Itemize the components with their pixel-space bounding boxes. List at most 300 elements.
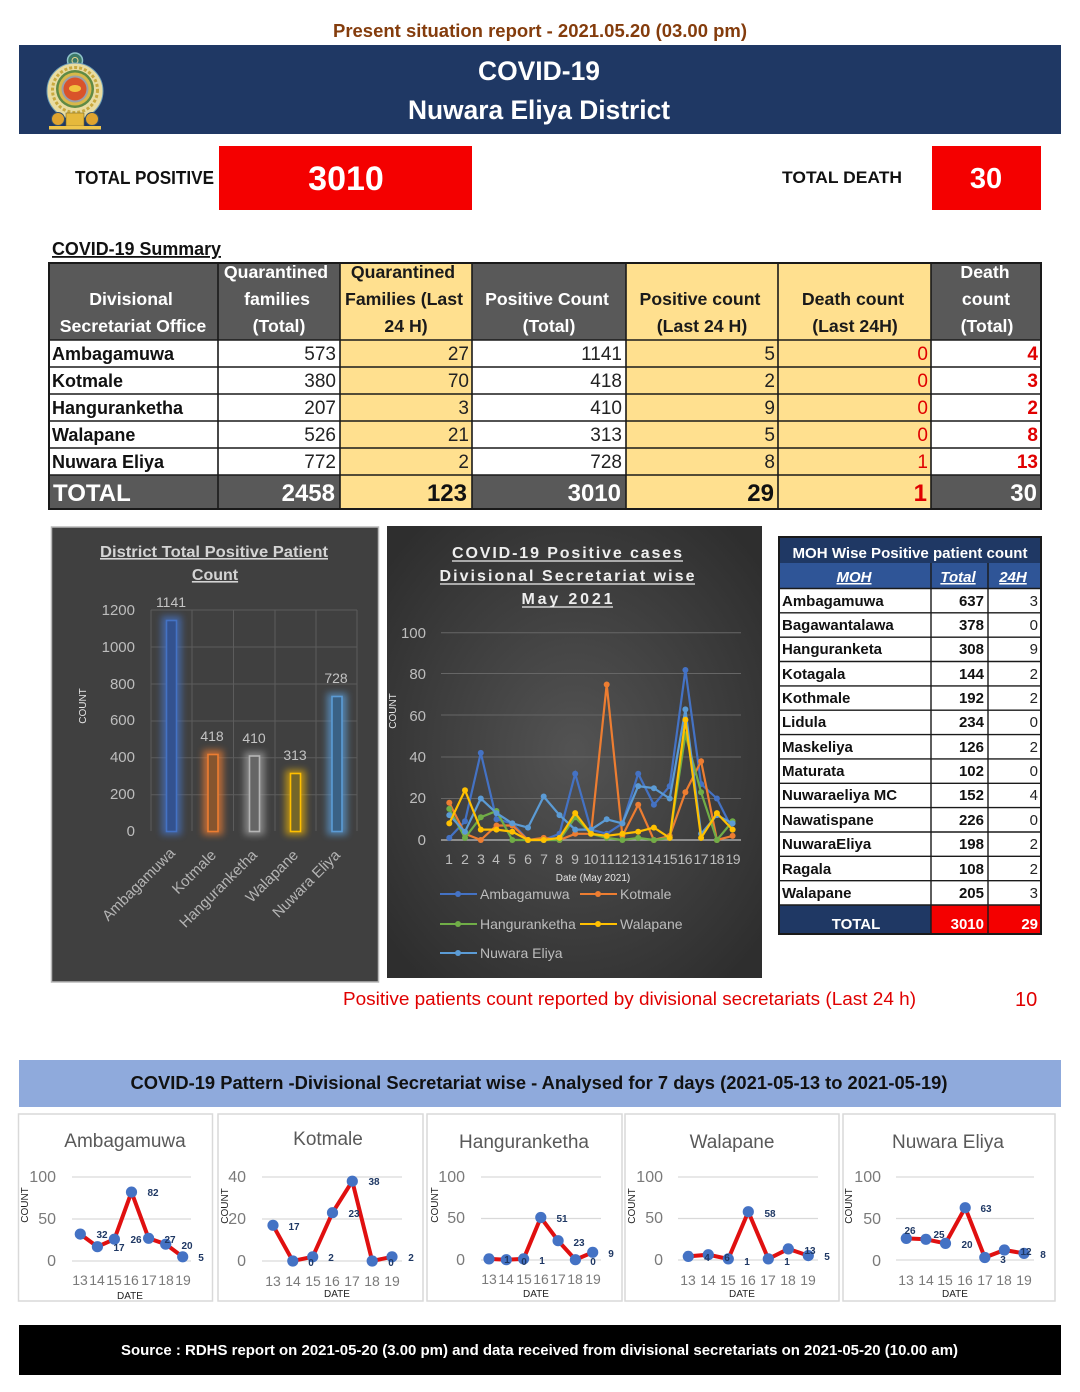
panel: Ambagamuwa pattern chart: 5 [198,1253,204,1264]
x axis labels: 16 [678,851,693,867]
table row: Nuwara Eliya: 8 [764,452,775,473]
panel: Kotmale pattern chart: 17 [344,1273,360,1289]
panel: Walapane pattern chart: 16 [740,1272,756,1288]
bar: Hanguranketha [242,730,266,835]
panel: Ambagamuwa pattern chart: DATE [117,1291,143,1302]
x axis labels: 8 [555,851,563,867]
table header [60,262,1013,336]
table row: Kotmale: 3 [1027,371,1038,392]
MOH rows: 144 [959,666,985,683]
panel: Nuwara Eliya pattern chart: 25 [933,1230,945,1241]
MOH rows: 637 [959,593,984,610]
table row: Ambagamuwa: 4 [1027,344,1038,365]
table row: Ambagamuwa: 5 [764,344,775,365]
table header: Quarantined [224,262,328,282]
table row: total: 29 [747,480,774,507]
x axis title: Date (May 2021) [556,873,630,884]
panel: Hanguranketha pattern chart: 1 [539,1256,545,1267]
MOH rows: 198 [959,836,984,853]
bar chart heading [100,544,329,584]
panel: Nuwara Eliya pattern chart: 17 [977,1272,993,1288]
table header: Positive count [640,289,761,309]
panel: Ambagamuwa pattern chart: 13 [72,1272,88,1288]
x axis labels: 3 [477,851,485,867]
panel: Nuwara Eliya pattern chart: 63 [980,1204,992,1215]
MOH rows: 126 [959,739,984,756]
table header: families [244,289,310,309]
y axis labels: 0 [418,832,426,849]
x axis labels: 15 [662,851,678,867]
y axis labels: 20 [409,790,426,807]
panel: Ambagamuwa pattern chart: 16 [123,1272,139,1288]
MOH rows: 3 [1030,593,1038,610]
legend: Hanguranketha [480,916,576,932]
title: COVID-19 [478,56,600,86]
panel: Kotmale pattern chart: 2 [408,1253,414,1264]
panel: Hanguranketha pattern chart: 15 [516,1271,532,1287]
total positive [75,146,472,210]
series: Hanguranketha [449,734,733,840]
table row: Kotmale: 418 [590,371,622,392]
MOH rows: 226 [959,812,984,829]
panel: Walapane pattern chart: DATE [729,1289,755,1300]
table row: Hanguranketha: 410 [590,398,622,419]
total death [782,146,1041,210]
x axis labels: 11 [600,851,615,867]
MOH rows: Kothmale [782,690,850,707]
MOH rows: 234 [959,714,985,731]
table row: Walapane: 526 [304,425,336,446]
MOH rows: 108 [959,861,984,878]
panel: Ambagamuwa pattern chart: 17 [141,1272,157,1288]
series: Ambagamuwa [449,670,733,840]
panel: Nuwara Eliya pattern chart: 26 [904,1226,916,1237]
panel: Walapane pattern chart: 18 [780,1272,796,1288]
table row: Walapane: 5 [764,425,775,446]
panel: Ambagamuwa pattern chart: 82 [147,1188,159,1199]
panel: Hanguranketha pattern chart: 0 [456,1252,465,1269]
x axis labels: 2 [461,851,469,867]
total positive: TOTAL POSITIVE [75,168,214,188]
panel: Kotmale pattern chart: 18 [364,1273,380,1289]
x axis labels: 12 [614,851,630,867]
source footer [19,1325,1061,1375]
MOH rows: 2 [1030,861,1038,878]
series: Kotmale [449,684,733,840]
line chart heading: May 2021 [522,591,613,608]
panel: Hanguranketha pattern chart [427,1114,622,1301]
panel: Nuwara Eliya pattern chart: 0 [872,1253,881,1270]
table row: Ambagamuwa [52,344,1038,365]
panel: Walapane pattern chart: 100 [636,1169,663,1186]
table header: Quarantined [351,262,455,282]
legend: Kotmale [620,886,672,902]
MOH rows: Ragala [782,861,832,878]
panel: Nuwara Eliya pattern chart: 15 [937,1272,953,1288]
panel: Kotmale pattern chart: 15 [305,1273,321,1289]
table header: Families (Last [345,289,463,309]
table row: Hanguranketha: 0 [917,398,928,419]
legend [440,886,683,961]
panel: Hanguranketha pattern chart: 0 [521,1257,527,1268]
table header: Death count [802,289,904,309]
panel: Nuwara Eliya pattern chart: 13 [898,1272,914,1288]
MOH column headers: 24H [998,569,1028,586]
table row: Nuwara Eliya [52,452,1038,473]
panel: Hanguranketha pattern chart: 17 [550,1271,566,1287]
table row: Ambagamuwa: 0 [917,344,928,365]
y axis labels: 0 [127,823,135,840]
panel: Nuwara Eliya pattern chart: 3 [1000,1255,1006,1266]
panel: Kotmale pattern chart: 19 [384,1273,400,1289]
panel: Ambagamuwa pattern chart: 100 [29,1169,56,1186]
table row: total: 123 [427,480,467,507]
table row: Ambagamuwa: 1141 [581,344,622,365]
panel: Nuwara Eliya pattern chart: 12 [1020,1247,1032,1258]
table header: (Last 24H) [812,316,898,336]
panel: Kotmale pattern chart [218,1114,423,1301]
title banner [19,45,1061,134]
total death: 30 [970,163,1002,195]
panel: Kotmale pattern chart: 16 [324,1273,340,1289]
panel: Nuwara Eliya pattern chart: 100 [854,1169,881,1186]
table row: Nuwara Eliya: 728 [590,452,622,473]
x axis labels: 9 [571,851,579,867]
x axis labels [445,851,741,867]
table header: (Total) [253,316,305,336]
category labels: Nuwara Eliya [269,846,344,921]
bar: Walapane: 313 [283,747,307,763]
table header: Secretariat Office [60,316,206,336]
panel: Walapane pattern chart: 15 [720,1272,736,1288]
x axis labels: 13 [630,851,646,867]
table row: total: 2458 [282,480,335,507]
panel: Kotmale pattern chart: Kotmale [293,1129,363,1150]
panel: Kotmale pattern chart: 38 [368,1177,380,1188]
panel: Nuwara Eliya pattern chart: 18 [996,1272,1012,1288]
table row: Kotmale: 380 [304,371,336,392]
table row: total: TOTAL [53,480,131,507]
panel: Hanguranketha pattern chart: 23 [573,1238,585,1249]
table row: Kotmale: 2 [764,371,775,392]
category labels: Walapane [242,847,302,906]
y axis labels: 40 [409,749,426,766]
x axis labels: 5 [508,851,516,867]
panel: Walapane pattern chart [625,1114,839,1301]
MOH rows: NuwaraEliya [782,836,872,853]
report date heading: Present situation report - 2021.05.20 (03.00 pm) [333,21,747,41]
MOH rows: 0 [1030,617,1038,634]
MOH rows: 2 [1030,666,1038,683]
table row: Nuwara Eliya: 13 [1017,452,1038,473]
y axis labels: 200 [110,786,135,803]
bar: Hanguranketha: 410 [242,730,266,746]
MOH rows: Lidula [782,714,827,731]
MOH rows: Nawatispane [782,812,874,829]
table row: Hanguranketha: 3 [458,398,469,419]
y axis labels: 600 [110,712,135,729]
MOH rows: Maturata [782,763,845,780]
MOH rows: Hanguranketa [782,641,883,658]
series: Walapane [449,720,733,840]
title [408,56,670,125]
table header: (Total) [961,316,1013,336]
bar: Ambagamuwa [156,594,186,835]
category labels [99,844,344,931]
table row: Hanguranketha: 207 [304,398,336,419]
y axis labels: 100 [401,625,426,642]
y axis labels: 400 [110,749,135,766]
MOH table heading: MOH Wise Positive patient count [792,545,1028,562]
table row: total: 30 [1010,480,1037,507]
panel: Hanguranketha pattern chart: 1 [504,1255,510,1266]
MOH rows: 0 [1030,714,1038,731]
MOH rows [782,593,1038,902]
category labels: Ambagamuwa [99,844,179,925]
pattern section banner: COVID-19 Pattern -Divisional Secretariat wise - Analysed for 7 days (2021-05-13 to 2021-05-19) [130,1073,948,1093]
panel: Nuwara Eliya pattern chart: 14 [918,1272,934,1288]
x axis labels: 7 [540,851,548,867]
panel: Nuwara Eliya pattern chart: 50 [863,1211,881,1228]
table row: Walapane: Walapane [52,425,135,445]
category labels: Hanguranketha [176,846,261,931]
panel: Hanguranketha pattern chart: 0 [590,1257,596,1268]
panel: Hanguranketha pattern chart: DATE [523,1289,549,1300]
bar chart heading: District Total Positive Patient [100,544,329,561]
MOH rows: Nuwaraeliya MC [782,787,897,804]
panel: Ambagamuwa pattern chart: Ambagamuwa [64,1131,186,1152]
table row: Walapane [52,425,1038,446]
panel: Walapane pattern chart: COUNT [627,1188,638,1224]
panel: Ambagamuwa pattern chart: COUNT [20,1187,31,1223]
table row: Walapane: 313 [590,425,622,446]
panel: Walapane pattern chart: 0 [654,1252,663,1269]
table header: Death [960,262,1010,282]
MOH rows: Ambagamuwa [782,593,884,610]
MOH rows: 192 [959,690,984,707]
y axis labels: 60 [409,708,426,725]
panel: Ambagamuwa pattern chart [18,1114,212,1302]
table row: Hanguranketha: 9 [764,398,775,419]
MOH column headers: MOH [836,569,873,586]
icon: national emblem [47,53,103,130]
table row: Kotmale: 70 [448,371,469,392]
MOH total row: 29 [1021,916,1038,933]
panel: Walapane pattern chart: 4 [704,1253,710,1264]
MOH total row: TOTAL [832,916,880,933]
panel: Kotmale pattern chart: 17 [288,1222,300,1233]
panel: Kotmale pattern chart: 14 [285,1273,301,1289]
panel: Walapane pattern chart: Walapane [690,1132,774,1153]
table row: Walapane: 8 [1027,425,1038,446]
summary heading: COVID-19 Summary [52,239,221,259]
table row: Hanguranketha: Hanguranketha [52,398,184,418]
MOH total row: 3010 [951,916,984,933]
table header: count [962,289,1010,309]
panel: Hanguranketha pattern chart: 51 [556,1214,568,1225]
y axis labels: 800 [110,676,135,693]
MOH rows: 205 [959,885,984,902]
bar: Kotmale: 418 [200,728,224,744]
MOH rows: Maskeliya [782,739,854,756]
y axis labels [401,625,426,849]
MOH rows: 2 [1030,836,1038,853]
panel: Ambagamuwa pattern chart: 27 [164,1235,176,1246]
divisional secretariat report note: Positive patients count reported by divisional secretariats (Last 24 h) [343,989,916,1009]
total death: TOTAL DEATH [782,168,902,187]
MOH rows: 3 [1030,885,1038,902]
table header: (Total) [523,316,575,336]
table header: Positive Count [485,289,609,309]
panel: Kotmale pattern chart: 23 [348,1209,360,1220]
panel: Nuwara Eliya pattern chart: 16 [957,1272,973,1288]
panel: Walapane pattern chart: 17 [760,1272,776,1288]
category labels: Kotmale [169,847,220,898]
x axis labels: 14 [646,851,662,867]
panel: Hanguranketha pattern chart: Hanguranketha [459,1132,589,1153]
table row: total: 1 [914,480,927,507]
table row: Kotmale: Kotmale [52,371,123,391]
MOH rows: 2 [1030,690,1038,707]
table row: total [53,480,1037,507]
y axis labels: 1000 [102,639,135,656]
table row: Walapane: 0 [917,425,928,446]
table row: total: 3010 [568,480,621,507]
MOH total row [832,916,1038,933]
panel: Walapane pattern chart: 19 [800,1272,816,1288]
table row: Hanguranketha [52,398,1038,419]
table header: Divisional [89,289,173,309]
table row: Nuwara Eliya: Nuwara Eliya [52,452,165,472]
panel: Walapane pattern chart: 1 [744,1257,750,1268]
axis title: count: COUNT [388,693,399,729]
source footer: Source : RDHS report on 2021-05-20 (3.00 pm) and data received from divisional secretariats on 2021-05-20 (10.00 am) [121,1343,958,1359]
y axis labels [102,602,135,840]
table row: Kotmale: 0 [917,371,928,392]
panel: Ambagamuwa pattern chart: 0 [47,1253,56,1270]
x axis labels: 4 [492,851,500,867]
panel: Kotmale pattern chart: 40 [228,1169,246,1186]
panel: Ambagamuwa pattern chart: 18 [158,1272,174,1288]
panel: Hanguranketha pattern chart: 16 [533,1271,549,1287]
MOH column headers [836,569,1028,586]
panel: MOH wise table [779,537,1041,934]
panel: Kotmale pattern chart: 0 [308,1258,314,1269]
panel: Walapane pattern chart: 58 [764,1209,776,1220]
panel: Hanguranketha pattern chart: 18 [567,1271,583,1287]
panel: Hanguranketha pattern chart: 50 [447,1210,465,1227]
panel: Nuwara Eliya pattern chart: 20 [961,1240,973,1251]
total positive: 3010 [308,160,384,198]
panel: Kotmale pattern chart: 0 [388,1258,394,1269]
summary table [49,262,1041,509]
line chart heading: COVID-19 Positive cases [452,545,682,562]
table row: Kotmale [52,371,1038,392]
bar chart heading: Count [192,567,239,584]
panel: Walapane pattern chart: 50 [645,1210,663,1227]
line chart heading: Divisional Secretariat wise [440,568,695,585]
legend: Walapane [620,916,683,932]
panel: Kotmale pattern chart: COUNT [220,1188,231,1224]
panel: Walapane pattern chart: 5 [824,1252,830,1263]
MOH rows: 0 [1030,763,1038,780]
title: Nuwara Eliya District [408,95,670,125]
panel: Hanguranketha pattern chart: 9 [608,1249,614,1260]
bar: Ambagamuwa: 1141 [156,594,186,610]
bar: Nuwara Eliya: 728 [324,670,348,686]
x axis labels: 19 [726,851,741,867]
panel: Nuwara Eliya pattern chart: COUNT [844,1188,855,1224]
MOH rows: Walapane [782,885,851,902]
panel: Walapane pattern chart: 13 [680,1272,696,1288]
MOH rows: Kotagala [782,666,846,683]
panel: Ambagamuwa pattern chart: 14 [89,1272,105,1288]
MOH rows: 378 [959,617,984,634]
panel: Kotmale pattern chart: DATE [324,1289,350,1300]
y axis labels: 80 [409,666,426,683]
panel: Nuwara Eliya pattern chart: DATE [942,1289,968,1300]
panel: Ambagamuwa pattern chart: 50 [38,1211,56,1228]
panel: Walapane pattern chart: 6 [724,1253,730,1264]
MOH rows: 9 [1030,641,1038,658]
MOH rows: 2 [1030,739,1038,756]
legend: Ambagamuwa [480,886,570,902]
panel: Nuwara Eliya pattern chart [843,1114,1055,1301]
panel: Nuwara Eliya pattern chart: 8 [1040,1250,1046,1261]
table row: Ambagamuwa: Ambagamuwa [52,344,175,364]
MOH rows: 102 [959,763,984,780]
panel: Ambagamuwa pattern chart: 19 [175,1272,191,1288]
panel: Hanguranketha pattern chart: 100 [438,1169,465,1186]
panel: Nuwara Eliya pattern chart: Nuwara Eliya [892,1132,1004,1153]
x axis labels: 17 [694,851,709,867]
table row: Nuwara Eliya: 772 [304,452,336,473]
panel: Nuwara Eliya pattern chart: 19 [1016,1272,1032,1288]
panel: Walapane pattern chart: 1 [784,1257,790,1268]
panel: Hanguranketha pattern chart: 19 [585,1271,601,1287]
bar: Walapane [283,747,307,835]
MOH rows: 0 [1030,812,1038,829]
table header: 24 H) [384,316,428,336]
x axis labels: 10 [584,851,599,867]
panel: Ambagamuwa pattern chart: 20 [181,1241,193,1252]
table header: (Last 24 H) [657,316,747,336]
panel: Ambagamuwa pattern chart: 15 [106,1272,122,1288]
panel: Ambagamuwa pattern chart: 32 [96,1230,108,1241]
MOH column headers: Total [940,569,976,586]
x axis labels: 6 [524,851,532,867]
panel: Kotmale pattern chart: 13 [265,1273,281,1289]
table row: Nuwara Eliya: 2 [458,452,469,473]
x axis labels: 18 [710,851,725,867]
line chart heading [440,545,695,608]
panel: Ambagamuwa pattern chart: 26 [130,1235,142,1246]
table row: Ambagamuwa: 573 [304,344,336,365]
MOH rows: Bagawantalawa [782,617,894,634]
panel: Hanguranketha pattern chart: COUNT [430,1187,441,1223]
panel: Walapane pattern chart: 14 [700,1272,716,1288]
table row: Nuwara Eliya: 1 [917,452,928,473]
panel: Ambagamuwa pattern chart: 17 [113,1243,125,1254]
divisional secretariat report note: 10 [1015,989,1037,1011]
MOH rows: 4 [1030,787,1038,804]
pattern section banner [19,1060,1061,1107]
panel: district total bar chart [52,527,378,982]
panel: Hanguranketha pattern chart: 14 [498,1271,514,1287]
y axis labels: 1200 [102,602,135,619]
panel: Kotmale pattern chart: 0 [237,1253,246,1270]
table row: Hanguranketha: 2 [1027,398,1038,419]
